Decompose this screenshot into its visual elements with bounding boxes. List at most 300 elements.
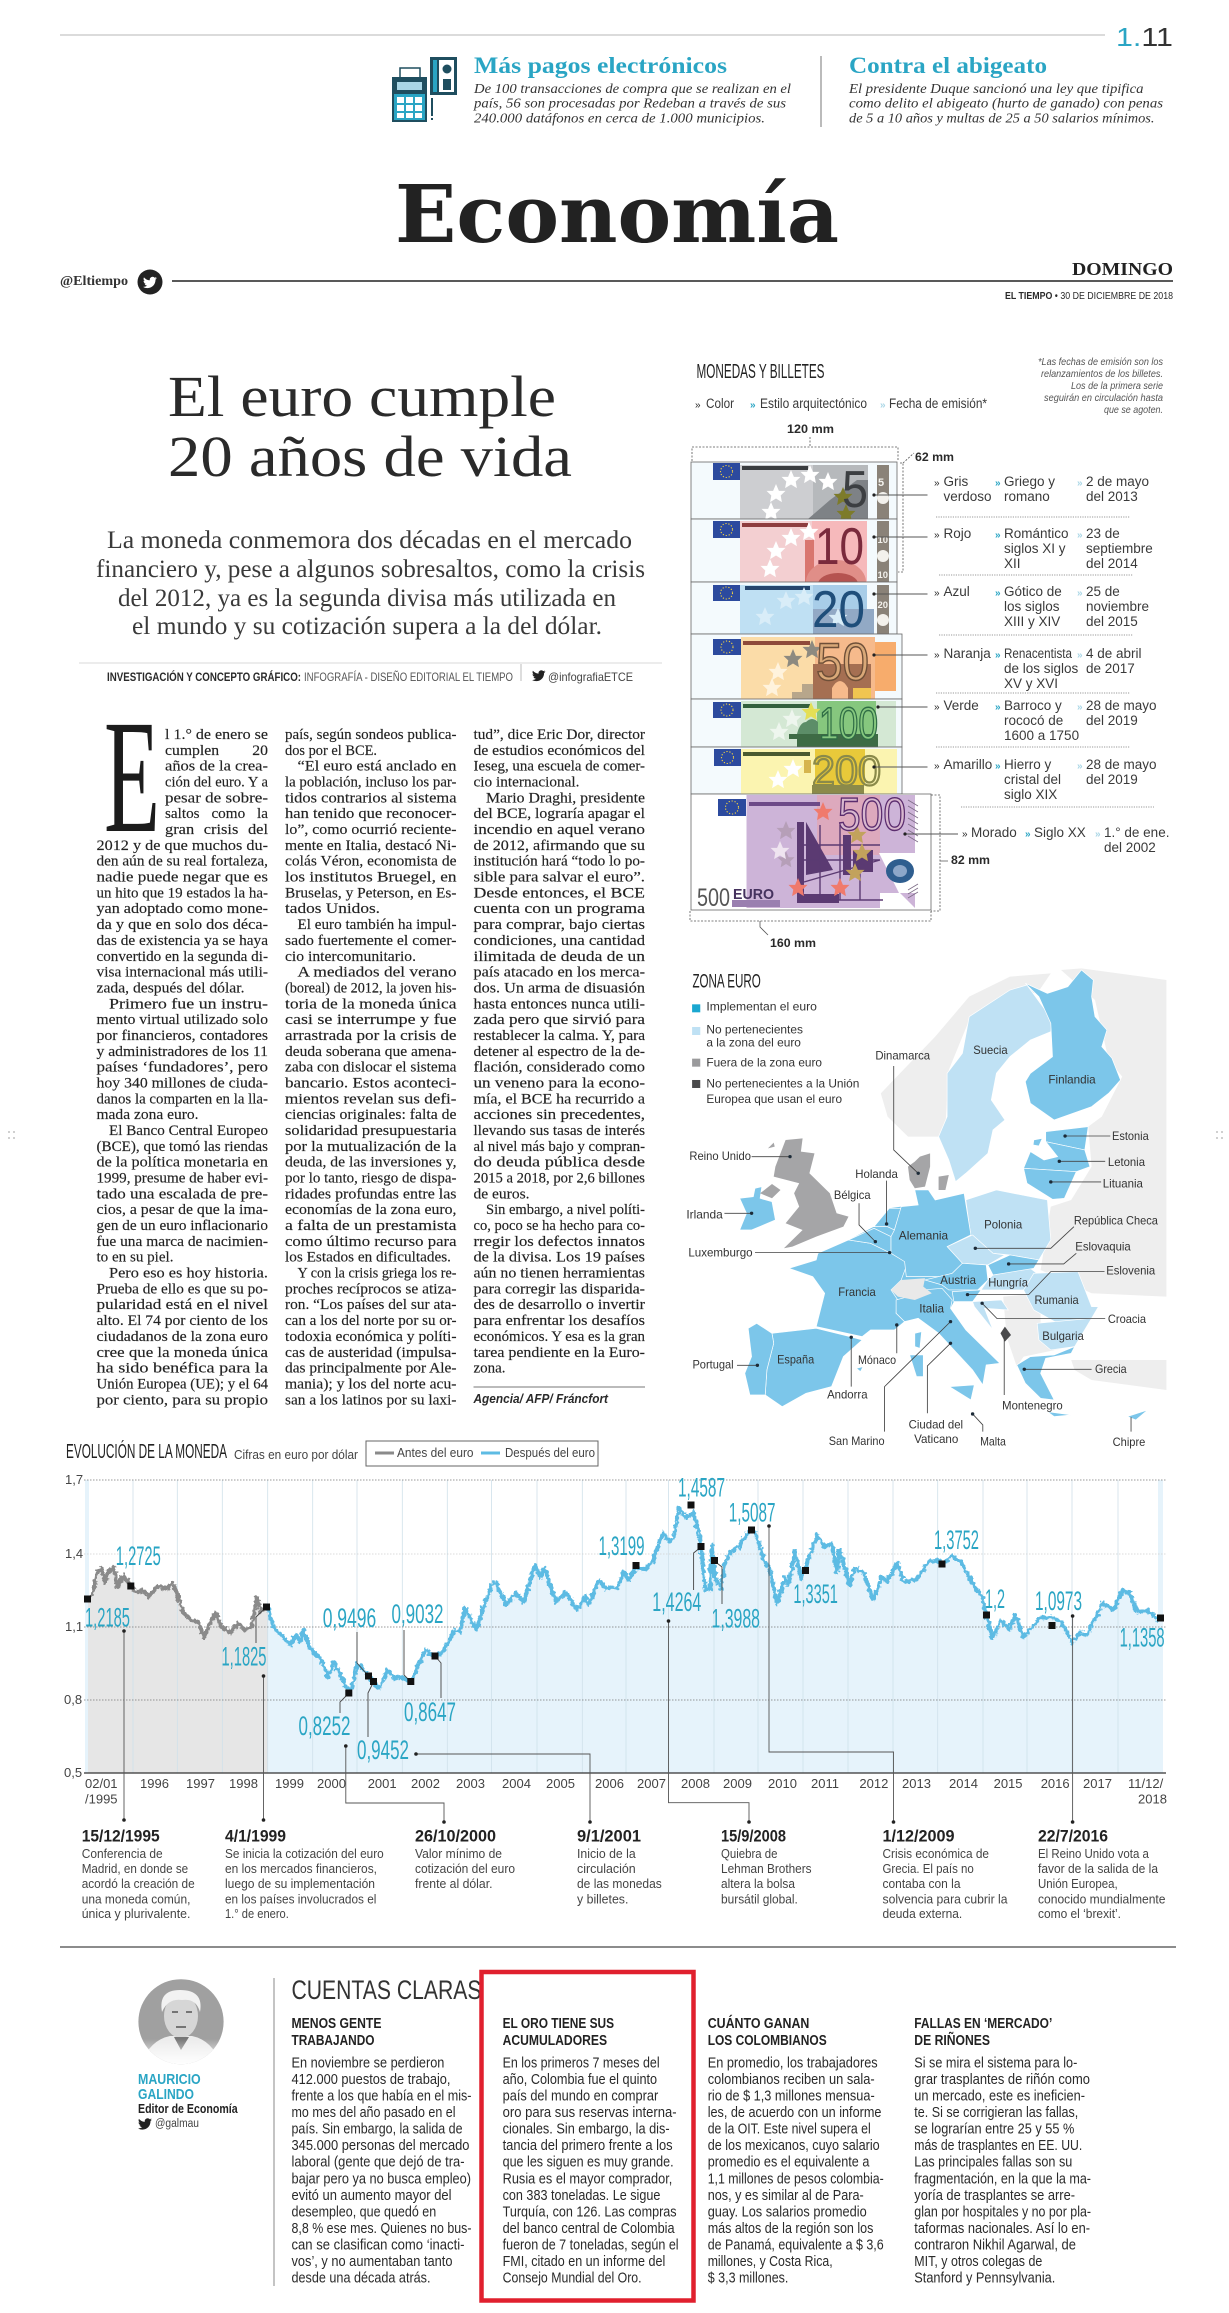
column: cuánto ganan los colombianos: más altos de la región son los — [708, 2221, 873, 2237]
value labels: 1,3351 — [793, 1579, 838, 1609]
article column 2: tados Unidos. — [285, 901, 380, 917]
country labels: Lituania — [1103, 1176, 1143, 1190]
country labels: Dinamarca — [875, 1048, 930, 1062]
event: 1/12/2009: 1/12/2009 — [882, 1827, 954, 1846]
article column 3: institución hará “todo lo po- — [474, 854, 645, 870]
column: cuánto ganan los colombianos: millones, y Costa Rica, — [708, 2254, 833, 2270]
article column 3: hasta entonces nunca utili- — [474, 996, 645, 1012]
article column 1: de la política monetaria en — [96, 1155, 269, 1171]
column: fallas en mercado de riñones: te. Si se corrigieran las fallas, — [914, 2105, 1078, 2121]
country labels: Eslovaquia — [1075, 1240, 1131, 1254]
row: 10 euro: Romántico — [1004, 526, 1069, 541]
brief: contra el abigeato: Contra el abigeato — [849, 53, 1047, 78]
x axis years: 2003 — [456, 1776, 485, 1791]
montenegro — [1000, 1327, 1011, 1342]
article column 3: país atacado en los merca- — [474, 965, 645, 981]
column: el oro tiene sus acumuladores: En los primeros 7 meses del — [503, 2056, 660, 2072]
neighbouring land — [881, 968, 1166, 1390]
article column 1: por ciento, para su propio — [96, 1392, 268, 1408]
row: 50 euro: » — [1077, 650, 1083, 661]
column: fallas en mercado de riñones: más de trasplantes en EE. UU. — [914, 2138, 1082, 2154]
standfirst: el mundo y su cotización supera a la del dólar. — [132, 613, 602, 640]
value labels: 1,2 — [985, 1584, 1005, 1614]
country labels: Holanda — [855, 1167, 898, 1181]
article column 3: económicos. Y esa es la gran — [474, 1329, 645, 1345]
event: 9/1/2001: y billetes. — [577, 1892, 628, 1906]
event: 1/12/2009: Crisis económica de — [882, 1846, 989, 1861]
row: 500 euro: » — [962, 829, 968, 840]
event: 4/1/1999: luego de su implementación — [225, 1876, 375, 1891]
article column 2: bancario. Estos aconteci- — [285, 1076, 456, 1092]
banknotes legend: Color — [706, 396, 734, 411]
row: 20 euro: Gótico de — [1004, 584, 1062, 599]
column: cuánto ganan los colombianos: 1,1 millones de pesos colombia- — [708, 2171, 884, 2187]
zona euro legend: Europea que usan el euro — [706, 1092, 842, 1106]
x axis years: 2007 — [637, 1776, 666, 1791]
brief: más pagos electrónicos: 240.000 datáfonos en cerca de 1.000 municipios. — [474, 112, 765, 126]
row: 100 euro: » — [934, 702, 940, 713]
article column 1: fue una marca de nacimien- — [96, 1234, 268, 1250]
country labels: Andorra — [827, 1388, 868, 1402]
row: 200 euro: cristal del — [1004, 772, 1061, 787]
row: 20 euro: » — [934, 588, 940, 599]
article column 1: 1999, presume de haber evi- — [96, 1170, 268, 1186]
row: 5 euro: » — [1077, 478, 1083, 489]
row: 500 euro: Siglo XX — [1034, 825, 1086, 840]
dimension: 82 mm and 160 mm: 82 mm — [951, 853, 990, 867]
value labels: 1,4587 — [678, 1473, 725, 1503]
banknote: 500 euro: EURO — [733, 886, 774, 903]
row: 20 euro: XIII y XIV — [1004, 614, 1060, 629]
article column 1: por financieros, contadores — [96, 1028, 268, 1044]
exchange line after euro — [268, 1508, 1161, 1689]
column: menos gente trabajando: país. Sin embargo, la salida de — [292, 2122, 462, 2138]
article column 2: dos por el BCE. — [285, 743, 377, 759]
country labels: República Checa — [1074, 1213, 1158, 1227]
event: 26/10/2000 — [415, 1827, 515, 1891]
row: 20 euro: noviembre — [1086, 599, 1149, 614]
row: 10 euro: Rojo — [944, 526, 971, 541]
emission dates footnote: relanzamientos de los billetes. — [1041, 368, 1163, 380]
x axis years: 2008 — [681, 1776, 710, 1791]
article column 3: acciones sin precedentes, — [474, 1107, 645, 1123]
value labels: 1,3752 — [934, 1525, 979, 1555]
row: 10 euro: » — [1077, 530, 1083, 541]
country labels: Vaticano — [914, 1432, 959, 1446]
event: 15/9/2008 — [721, 1827, 812, 1906]
article column 2: El euro también ha impul- — [298, 917, 456, 933]
credits line — [79, 663, 662, 684]
value labels: 0,9452 — [357, 1735, 409, 1765]
event leader lines — [122, 1524, 1074, 1824]
article column 2: todoxia económica y políti- — [285, 1329, 457, 1345]
banknotes legend: Estilo arquitectónico — [760, 396, 867, 411]
country labels: Grecia — [1095, 1362, 1127, 1376]
event: 1/12/2009: solvencia para cubrir la — [882, 1892, 1008, 1906]
value labels: 1,5087 — [729, 1498, 776, 1528]
row: 500 euro: » — [1025, 829, 1031, 840]
article column 2: san a los latinos por su laxi- — [285, 1392, 456, 1408]
article column 2: los Estados en dificultades. — [285, 1250, 451, 1266]
row: 100 euro: rococó de — [1004, 713, 1063, 728]
column: fallas en mercado de riñones: Si se mira el sistema para lo- — [914, 2056, 1077, 2072]
dimension: 120 mm — [692, 422, 898, 461]
country labels: Polonia — [984, 1217, 1022, 1231]
column: el oro tiene sus acumuladores: oro para sus reservas interna- — [503, 2105, 677, 2121]
article column 3: Sin embargo, a nivel políti- — [486, 1202, 645, 1218]
article column 1: ciudadanos de la zona euro — [96, 1329, 268, 1345]
x axis years: 2009 — [723, 1776, 752, 1791]
article column 3: un veneno para la econo- — [474, 1076, 645, 1092]
article column 2: zaba con dislocar el sistema — [285, 1060, 457, 1076]
event: 4/1/1999: en los mercados financieros, — [225, 1861, 377, 1876]
event: 4/1/1999: Se inicia la cotización del euro — [225, 1846, 384, 1861]
article column 2: ron. “Los países del sur ata- — [285, 1297, 456, 1313]
article column 2: por lo tanto, riesgo de dispa- — [285, 1170, 456, 1186]
row: 500 euro: 1.° de ene. — [1104, 825, 1169, 840]
banknote table text — [934, 474, 1169, 855]
article column 1 — [96, 727, 269, 1408]
x axis years: /1995 — [85, 1791, 118, 1806]
value labels: 1,1358 — [1120, 1623, 1165, 1653]
banknote: 100 euro: 100 — [819, 698, 878, 749]
zona euro legend: No pertenecientes — [706, 1022, 803, 1036]
row: 5 euro: 2 de mayo — [1086, 474, 1149, 489]
credits line: INFOGRAFÍA - DISEÑO EDITORIAL EL TIEMPO — [304, 671, 513, 684]
article column 1: pesar de sobre- — [165, 790, 268, 806]
row: 20 euro: 25 de — [1086, 584, 1120, 599]
event: 15/12/1995: única y plurivalente. — [82, 1906, 190, 1921]
article column 2: han tenido que reconocer- — [285, 806, 457, 822]
event: 15/9/2008: altera la bolsa — [721, 1876, 796, 1891]
article column 2: proches recíprocos se atiza- — [285, 1281, 456, 1297]
article column 1: to en su piel. — [96, 1250, 174, 1266]
article column 1: cree que la moneda única — [96, 1345, 268, 1361]
value labels: 0,9032 — [392, 1599, 444, 1629]
article column 2 — [285, 727, 457, 1408]
outside the euro zone — [760, 1138, 949, 1248]
column: el oro tiene sus acumuladores: ACUMULADORES — [503, 2033, 607, 2049]
article column 2: cio intercomunitario. — [285, 949, 416, 965]
columnist name — [138, 2071, 238, 2130]
article column 3: llevando sus tasas de interés — [474, 1123, 645, 1139]
event: 26/10/2000: frente al dólar. — [415, 1876, 492, 1891]
chart heading: EVOLUCIÓN DE LA MONEDA — [66, 1440, 227, 1463]
article column 3: co, poco se ha hecho para co- — [474, 1218, 645, 1234]
row: 50 euro: de 2017 — [1086, 661, 1135, 676]
columnist name: GALINDO — [138, 2086, 194, 2103]
x axis years: 2004 — [502, 1776, 531, 1791]
country labels: Italia — [919, 1302, 944, 1316]
column: el oro tiene sus acumuladores: tancia del primero frente a los — [503, 2138, 673, 2154]
row: 20 euro: los siglos — [1004, 599, 1060, 614]
article column 2: casi se interrumpe y fue — [285, 1012, 457, 1028]
article column 2: deuda soberana que amena- — [285, 1044, 456, 1060]
dimension: 120 mm: 120 mm — [787, 422, 834, 436]
event: 15/12/1995: Madrid, en donde se — [82, 1861, 188, 1876]
row: 5 euro: Gris — [944, 474, 968, 489]
row: 5 euro: » — [934, 478, 940, 489]
event: 15/12/1995: acordó la creación de — [82, 1876, 195, 1891]
country labels: España — [777, 1353, 814, 1367]
value labels: 1,4264 — [652, 1587, 701, 1617]
country labels: Malta — [980, 1434, 1006, 1448]
article column 3: flación, considerado como — [474, 1060, 645, 1076]
chart areas — [85, 1480, 1163, 1773]
brief: más pagos electrónicos — [473, 53, 791, 126]
zona euro legend: Implementan el euro — [706, 1000, 817, 1014]
article column 3: dos. Un arma de disuasión — [474, 980, 646, 996]
article column 2: como último recurso para — [285, 1234, 457, 1250]
columnist name: Editor de Economía — [138, 2102, 238, 2116]
row: 5 euro: verdoso — [944, 489, 992, 504]
row: 500 euro — [962, 825, 1169, 855]
y axis labels: 1,7 — [65, 1472, 83, 1487]
article column 3: do deuda pública desde — [474, 1155, 645, 1171]
x axis years: 2000 — [317, 1776, 346, 1791]
article column 2: a falta de un prestamista — [285, 1218, 457, 1234]
column: cuánto ganan los colombianos: colombianos reciben un sala- — [708, 2072, 875, 2088]
column: fallas en mercado de riñones — [914, 2016, 1091, 2286]
column: cuánto ganan los colombianos: CUÁNTO GANAN — [708, 2015, 809, 2032]
column: menos gente trabajando: En noviembre se perdieron — [292, 2056, 444, 2072]
article column 1: convertido en la segunda di- — [96, 949, 268, 965]
chart legend: Después del euro — [505, 1445, 595, 1460]
column: menos gente trabajando: 345.000 personas del mercado — [292, 2138, 470, 2154]
article column 1: den aún de su real fortaleza, — [96, 854, 268, 870]
article column 2: Y con la crisis griega los re- — [298, 1266, 456, 1282]
article column 1: Pero eso es hoy historia. — [109, 1266, 268, 1282]
article column 3: Desde entonces, el BCE — [474, 885, 645, 901]
column: el oro tiene sus acumuladores: año, Colombia fue el quinto — [503, 2072, 657, 2088]
row: 500 euro: » — [1095, 829, 1101, 840]
article column 1: El Banco Central Europeo — [109, 1123, 268, 1139]
article column 2: la población, incluso los par- — [285, 774, 456, 790]
column: menos gente trabajando: frente a los que había en el mis- — [292, 2089, 472, 2105]
row: 50 euro: XV y XVI — [1004, 676, 1058, 691]
article column 1: zada, después del dólar. — [96, 980, 244, 996]
country labels: Mónaco — [858, 1353, 896, 1367]
article column 1: Prueba de ello es que su po- — [96, 1281, 268, 1297]
column: el oro tiene sus acumuladores: país del mundo en comprar — [503, 2089, 658, 2105]
column: el oro tiene sus acumuladores — [503, 2016, 679, 2286]
row: 500 euro: Morado — [971, 825, 1017, 840]
zona euro legend: a la zona del euro — [706, 1036, 801, 1050]
article column 1: yan adoptado como mone- — [96, 901, 268, 917]
banknotes legend: » — [750, 400, 756, 411]
event: 22/7/2016 — [1038, 1827, 1166, 1921]
banknote: 100 euro — [691, 698, 902, 749]
article column 3: incendio en aquel verano — [474, 822, 645, 838]
event: 22/7/2016: Unión Europea, — [1038, 1876, 1118, 1891]
event: 1/12/2009: deuda externa. — [882, 1906, 962, 1921]
row: 10 euro: siglos XI y — [1004, 541, 1066, 556]
article column 1: mento virtual utilizado solo — [96, 1012, 268, 1028]
column: cuánto ganan los colombianos: En promedio, los trabajadores — [708, 2056, 878, 2072]
brief: contra el abigeato: El presidente Duque sancionó una ley que tipifica — [848, 82, 1144, 97]
value labels: 1,3988 — [712, 1604, 760, 1634]
banknote: 50 euro: 50 — [816, 633, 869, 692]
row: 5 euro — [934, 474, 1149, 504]
row: 20 euro: » — [995, 588, 1001, 599]
article column 3: de la divisa. Los 19 países — [474, 1250, 645, 1266]
brief: contra el abigeato — [848, 53, 1164, 126]
country labels: Francia — [838, 1285, 876, 1299]
article column 2: A mediados del verano — [298, 965, 456, 981]
x axis years: 2005 — [546, 1776, 575, 1791]
row: 200 euro — [934, 757, 1157, 802]
column: cuánto ganan los colombianos: de los mexicanos, cuyo salario — [708, 2138, 880, 2154]
article column 3: cio internacional. — [474, 774, 580, 790]
emission dates footnote: *Las fechas de emisión son los — [1038, 356, 1164, 368]
article column 1: gran crisis del — [165, 822, 268, 838]
banknote: 5 euro: 5 — [878, 477, 884, 489]
article column 3: detener al espectro de la de- — [474, 1044, 645, 1060]
column: cuánto ganan los colombianos: rio de $ 1,3 millones mensua- — [708, 2089, 875, 2105]
column: fallas en mercado de riñones: FALLAS EN ‘MERCADO’ — [914, 2016, 1052, 2032]
article column 1: hoy 340 millones de ciuda- — [96, 1076, 268, 1092]
article column 2: colás Véron, economista de — [285, 854, 457, 870]
row: 50 euro: » — [934, 650, 940, 661]
article column 2: ciencias originales: falta de — [285, 1107, 457, 1123]
article column 3: condiciones, una cantidad — [474, 933, 646, 949]
article column 3: mía, el BCE ha recurrido a — [474, 1091, 645, 1107]
row: 20 euro: » — [1077, 588, 1083, 599]
x axis years: 2015 — [994, 1776, 1023, 1791]
column: el oro tiene sus acumuladores: del banco central de Colombia — [503, 2221, 675, 2237]
x axis years: 02/01 — [85, 1776, 118, 1791]
column: menos gente trabajando: desde una década atrás. — [292, 2270, 430, 2286]
country labels: Letonia — [1108, 1155, 1145, 1169]
article column 1: años de la crea- — [165, 759, 268, 775]
brief: contra el abigeato: de 5 a 10 años y multas de 25 a 50 salarios mínimos. — [849, 112, 1154, 126]
row: 100 euro: » — [995, 702, 1001, 713]
row: 500 euro: del 2002 — [1104, 840, 1156, 855]
country labels: Alemania — [899, 1228, 948, 1242]
banknotes legend — [695, 396, 988, 411]
headline: El euro cumple — [168, 364, 556, 429]
row: 200 euro: Amarillo — [944, 757, 992, 772]
event: 4/1/1999: 4/1/1999 — [225, 1827, 286, 1846]
brief: más pagos electrónicos: De 100 transacciones de compra que se realizan en el — [473, 82, 791, 97]
column: cuánto ganan los colombianos: LOS COLOMBIANOS — [708, 2033, 827, 2049]
article column 2: Bruselas, y Peterson, en Es- — [285, 885, 457, 901]
data markers — [84, 1502, 1164, 1696]
emission dates footnote: seguirán en circulación hasta — [1044, 392, 1163, 404]
x axis years: 2012 — [859, 1776, 888, 1791]
x axis years: 2017 — [1083, 1776, 1112, 1791]
column: el oro tiene sus acumuladores: Consejo Mundial del Oro. — [503, 2270, 642, 2286]
x axis years: 11/12/ — [1128, 1776, 1164, 1791]
banknote: 50 euro — [691, 633, 902, 699]
article column 2: das principalmente por Ale- — [285, 1361, 457, 1377]
article column 3: Mario Draghi, presidente — [486, 790, 645, 806]
article column 1: l 1.° de enero se — [165, 727, 268, 743]
article column 3: para corregir las disparida- — [474, 1281, 645, 1297]
event: 22/7/2016: El Reino Unido vota a — [1038, 1846, 1150, 1861]
event: 26/10/2000: Valor mínimo de — [415, 1846, 502, 1861]
column: el oro tiene sus acumuladores: que les siguen es muy grande. — [503, 2155, 674, 2171]
article column 2: cas de austeridad (impulsa- — [285, 1345, 456, 1361]
article column 1: ha sido benéfica para la — [96, 1361, 268, 1377]
row: 10 euro: septiembre — [1086, 541, 1153, 556]
zona euro heading: ZONA EURO — [692, 971, 761, 992]
section bar: twitter handle, date: EL TIEMPO • 30 DE DICIEMBRE DE 2018 — [1005, 290, 1173, 302]
column: menos gente trabajando: MENOS GENTE — [292, 2016, 382, 2032]
chart grid — [84, 1480, 1166, 1773]
y axis labels — [64, 1472, 83, 1780]
banknote: 5 euro: 5 — [842, 461, 868, 519]
event: 4/1/1999: en los países involucrados el — [225, 1892, 376, 1906]
columnist name: @galmau — [155, 2118, 199, 2130]
country labels: Bulgaria — [1042, 1329, 1084, 1343]
article column 3: de euros. — [474, 1186, 530, 1202]
article column 3: de 2012, afirmando que su — [474, 838, 646, 854]
switzerland — [891, 1278, 932, 1300]
x axis years: 1998 — [229, 1776, 258, 1791]
row: 50 euro: » — [995, 650, 1001, 661]
article column 1: países ‘fundadores’, pero — [96, 1060, 268, 1076]
event: 22/7/2016: conocido mundialmente — [1038, 1892, 1166, 1906]
banknote: 500 euro — [691, 788, 931, 912]
article column 1: gen de un euro inflacionario — [96, 1218, 268, 1234]
banknote: 200 euro: 200 — [812, 747, 881, 794]
row: 5 euro: Griego y — [1004, 474, 1055, 489]
row: 20 euro: del 2015 — [1086, 614, 1138, 629]
row: 50 euro: Naranja — [944, 646, 991, 661]
article column 3: des de desarrollo o invertir — [474, 1297, 645, 1313]
row: 200 euro: » — [1077, 761, 1083, 772]
x axis years: 2014 — [949, 1776, 978, 1791]
x axis years: 2011 — [811, 1776, 839, 1791]
drop cap: E — [104, 688, 160, 867]
x axis years: 1996 — [140, 1776, 169, 1791]
article column 2: sado fuertemente el comer- — [285, 933, 456, 949]
row: 50 euro — [934, 646, 1142, 691]
country labels: Irlanda — [686, 1208, 723, 1222]
banknote: 10 euro: 10 — [878, 570, 888, 581]
article column 3: tarea pendiente en la Euro- — [474, 1345, 645, 1361]
x axis years: 1999 — [275, 1776, 304, 1791]
article column 3: de estudios económicos del — [474, 743, 645, 759]
value labels — [85, 1473, 1165, 1765]
column: menos gente trabajando: TRABAJANDO — [292, 2033, 374, 2049]
article column 3: al nivel más bajo y compran- — [474, 1139, 645, 1155]
section bar: twitter handle, date: @Eltiempo — [60, 274, 128, 289]
column: cuánto ganan los colombianos: promedio es el equivalente a — [708, 2155, 870, 2171]
red highlight box — [482, 1972, 694, 2300]
zona euro legend — [692, 1000, 859, 1106]
banknote: 500 euro: 500 — [838, 788, 906, 840]
article column 3: 2015 a 2018, por 2,6 billones — [474, 1170, 645, 1186]
column: fallas en mercado de riñones: yoría de trasplantes se arre- — [914, 2188, 1075, 2204]
column: fallas en mercado de riñones: DE RIÑONES — [914, 2031, 990, 2049]
row: 50 euro: Renacentista — [1004, 646, 1072, 661]
dimension: 82 mm and 160 mm: 160 mm — [770, 936, 816, 950]
column: fallas en mercado de riñones: Stanford y Pennsylvania. — [914, 2270, 1055, 2286]
article column 2: (boreal) de 2012, la joven his- — [285, 980, 456, 996]
row: 200 euro: » — [934, 761, 940, 772]
column: menos gente trabajando: vos’, y no aumentaban tanto — [292, 2254, 452, 2270]
banknote: 5 euro — [691, 461, 897, 522]
country labels: Ciudad del — [909, 1417, 963, 1431]
cuentas claras heading: CUENTAS CLARAS — [292, 1975, 482, 2005]
column: fallas en mercado de riñones: un mercado, este es ineficien- — [914, 2089, 1085, 2105]
emission dates footnote — [1038, 356, 1164, 416]
article column 2: deuda, de las inversiones y, — [285, 1155, 456, 1171]
y axis labels: 1,4 — [65, 1546, 83, 1561]
article column 1: pularidad está en el nivel — [96, 1297, 268, 1313]
